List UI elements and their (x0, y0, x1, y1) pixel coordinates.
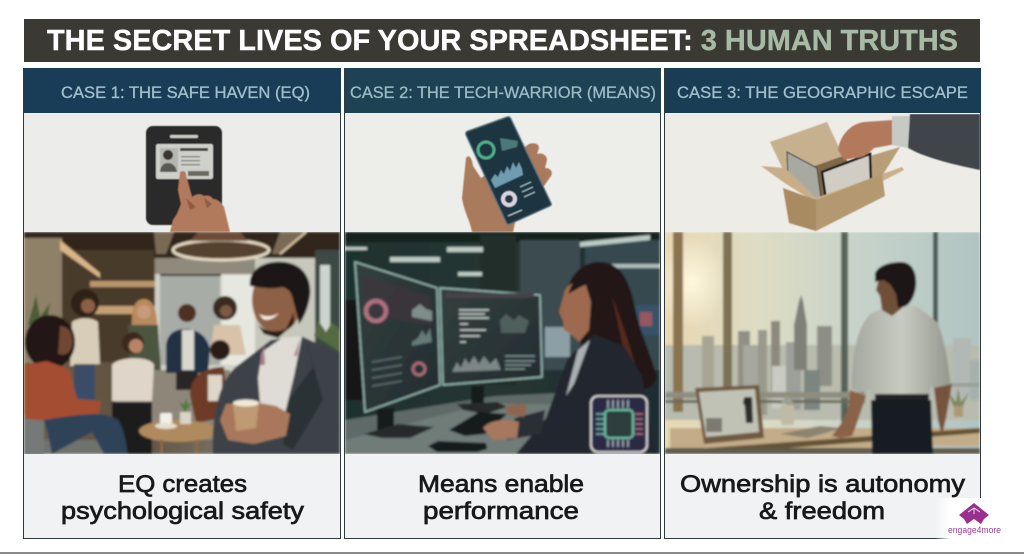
plant on desk (948, 388, 969, 417)
icon panel background (345, 114, 660, 232)
caption 1: EQ creates (118, 471, 247, 498)
coffee table (139, 398, 217, 454)
background person right (210, 296, 246, 355)
foreground man (213, 262, 340, 454)
right monitor (440, 288, 542, 385)
caption 3: Ownership is autonomy (680, 471, 965, 498)
skyline (665, 295, 980, 420)
seated man rust jacket (190, 340, 230, 423)
monitor stands (364, 386, 507, 438)
photo: woman at dual monitors (345, 232, 660, 454)
icon panel background (24, 114, 340, 232)
desk (669, 427, 980, 450)
bottom edge line (0, 552, 1024, 554)
caption 3 (665, 454, 980, 538)
caption 1 (24, 454, 340, 538)
case 2 header: CASE 2: THE TECH-WARRIOR (MEANS) (350, 83, 656, 102)
case 1 header: CASE 1: THE SAFE HAVEN (EQ) (61, 83, 310, 102)
icon: smartphone in hand (462, 117, 552, 232)
case 1 header (24, 68, 341, 113)
window frames (665, 232, 980, 422)
caption 2: Means enable (418, 471, 584, 498)
panel: case 2 the tech warrior (344, 68, 661, 538)
icon: microchip badge (591, 396, 647, 452)
icon panel background (665, 114, 980, 232)
left monitor (355, 262, 440, 412)
icon: id card reader with finger (146, 126, 230, 232)
icon: hand packing a cardboard box (761, 114, 980, 231)
title bar: THE SECRET LIVES OF YOUR SPREADSHEET: 3 HUMAN TRUTHS (47, 25, 958, 57)
case 3 header (665, 68, 981, 113)
engage4more logo (935, 498, 1002, 540)
man from behind (832, 262, 952, 454)
photo: man overlooking skyline (656, 232, 980, 454)
foreground plant (314, 320, 340, 352)
panel: case 1 the safe haven (24, 68, 341, 538)
photo: team laughing in lounge (24, 232, 340, 455)
caption 2: performance (423, 498, 579, 525)
seated woman rust top (25, 315, 128, 454)
caption 1: psychological safety (61, 498, 304, 525)
engage4more logo: engage4more (948, 525, 1001, 535)
caption 2 (345, 454, 660, 538)
panel: case 3 the geographic escape (656, 68, 981, 538)
case 2 header (345, 68, 661, 113)
case 3 header: CASE 3: THE GEOGRAPHIC ESCAPE (677, 83, 968, 102)
woman (483, 262, 656, 454)
seated woman white blouse (112, 332, 154, 454)
picture frame on desk (695, 385, 764, 444)
caption 3: & freedom (759, 498, 885, 525)
pen cup and papers (779, 396, 842, 438)
background man in blue blazer (166, 304, 210, 390)
standing blonde woman (128, 299, 161, 370)
keyboard and phone (428, 412, 507, 452)
background plant (28, 295, 50, 327)
standing woman cream top (70, 289, 100, 400)
